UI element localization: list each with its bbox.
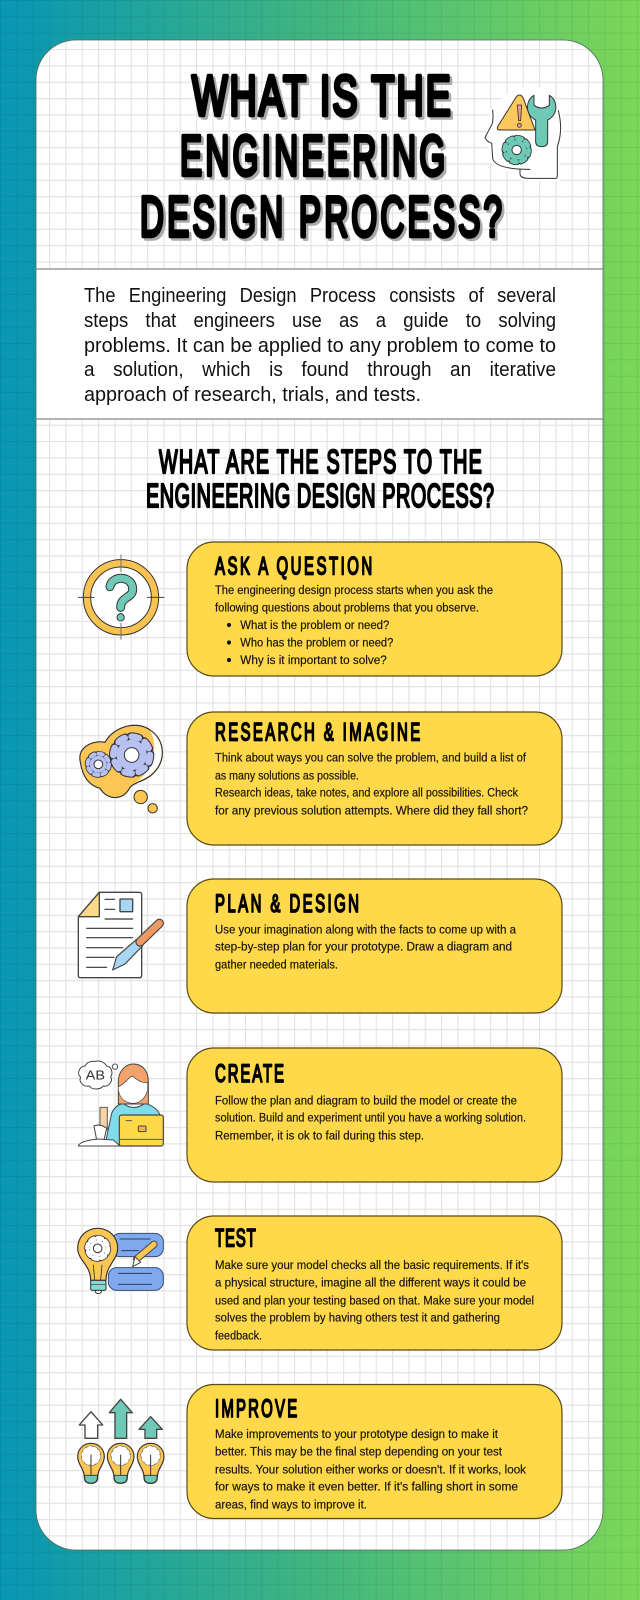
step text: Follow the plan and diagram to build the model or create the: [215, 1093, 517, 1107]
step text: for any previous solution attempts. Where did they fall short?: [215, 803, 528, 817]
heading: test: TEST: [215, 1225, 256, 1253]
step text: solution. Build and experiment until you have a working solution.: [215, 1111, 526, 1125]
step text: Remember, it is ok to fail during this step.: [215, 1128, 424, 1142]
icon: person with laptop: [78, 1061, 163, 1146]
icon: light bulb with notes and pencil: [78, 1228, 163, 1294]
icon: document and pen: [78, 892, 159, 978]
panel: research and imagine: [187, 712, 562, 845]
title: [140, 64, 504, 251]
step text: as many solutions as possible.: [215, 768, 359, 782]
text block: introduction: The Engineering Design Process consists of several: [84, 285, 556, 307]
step text: Research ideas, take notes, and explore all possibilities. Check: [215, 786, 519, 800]
step text: solves the problem by having others test it and gathering: [215, 1311, 500, 1325]
step text: Make sure your model checks all the basic requirements. If it's: [215, 1258, 529, 1272]
text block: introduction: a solution, which is found through an iterative: [84, 359, 556, 381]
icon: head with warning, wrench and gear: [485, 90, 561, 178]
step text: Why is it important to solve?: [240, 653, 387, 667]
icon: person with laptop: AB: [86, 1068, 105, 1082]
panel: test: [187, 1216, 562, 1350]
heading: plan and design: PLAN & DESIGN: [215, 890, 359, 918]
step text: [215, 1093, 526, 1142]
panel: create: [187, 1048, 562, 1182]
title: ENGINEERING: [182, 126, 448, 190]
step text: areas, find ways to improve it.: [215, 1497, 367, 1511]
heading: create: CREATE: [215, 1060, 284, 1088]
step text: Make improvements to your prototype design to make it: [215, 1427, 499, 1441]
text block: introduction: [84, 285, 556, 406]
step text: [215, 583, 493, 667]
heading: improve: IMPROVE: [215, 1395, 297, 1423]
step text: results. Your solution either works or doesn't. If it works, look: [215, 1462, 527, 1476]
heading: research and imagine: RESEARCH & IMAGINE: [215, 719, 420, 747]
title: ENGINEERING: [180, 124, 445, 187]
step text: [215, 1258, 534, 1342]
step text: Who has the problem or need?: [240, 636, 393, 650]
subheading: ENGINEERING DESIGN PROCESS?: [146, 477, 494, 514]
panel: plan and design: [187, 879, 562, 1013]
subheading: [146, 443, 494, 514]
panel: improve: [187, 1384, 562, 1518]
text block: introduction: steps that engineers use as a guide to solving: [84, 310, 556, 332]
step text: following questions about problems that you observe.: [215, 601, 479, 615]
subheading: WHAT ARE THE STEPS TO THE: [159, 443, 482, 480]
step text: step-by-step plan for your prototype. Draw a diagram and: [215, 940, 512, 954]
step text: Think about ways you can solve the problem, and build a list of: [215, 751, 527, 765]
panel: ask a question: [187, 542, 562, 676]
step text: a physical structure, imagine all the different ways it could be: [215, 1276, 526, 1290]
icon: gears in thought bubble: [80, 725, 162, 813]
title: DESIGN PROCESS?: [140, 185, 502, 248]
step text: [215, 751, 528, 817]
heading: ask a question: ASK A QUESTION: [215, 553, 372, 581]
title: WHAT IS THE: [192, 64, 451, 128]
step text: used and plan your testing based on that. Make sure your model: [215, 1293, 534, 1307]
icon: arrows and light bulbs: [78, 1399, 164, 1483]
step text: [215, 922, 516, 971]
step text: gather needed materials.: [215, 957, 338, 971]
text block: introduction: problems. It can be applied to any problem to come to: [84, 335, 556, 357]
text block: introduction: approach of research, trials, and tests.: [84, 384, 421, 406]
step text: for ways to make it even better. If it's falling short in some: [215, 1480, 518, 1494]
step text: [215, 1427, 527, 1511]
title: DESIGN PROCESS?: [142, 187, 504, 251]
step text: The engineering design process starts when you ask the: [215, 583, 493, 597]
step text: Use your imagination along with the facts to come up with a: [215, 922, 516, 936]
step text: better. This may be the final step depending on your test: [215, 1445, 503, 1459]
step text: What is the problem or need?: [240, 618, 389, 632]
step text: feedback.: [215, 1328, 262, 1342]
panel: introduction band: [36, 269, 602, 419]
title: WHAT IS THE: [194, 67, 453, 130]
icon: question mark target: [78, 555, 164, 639]
